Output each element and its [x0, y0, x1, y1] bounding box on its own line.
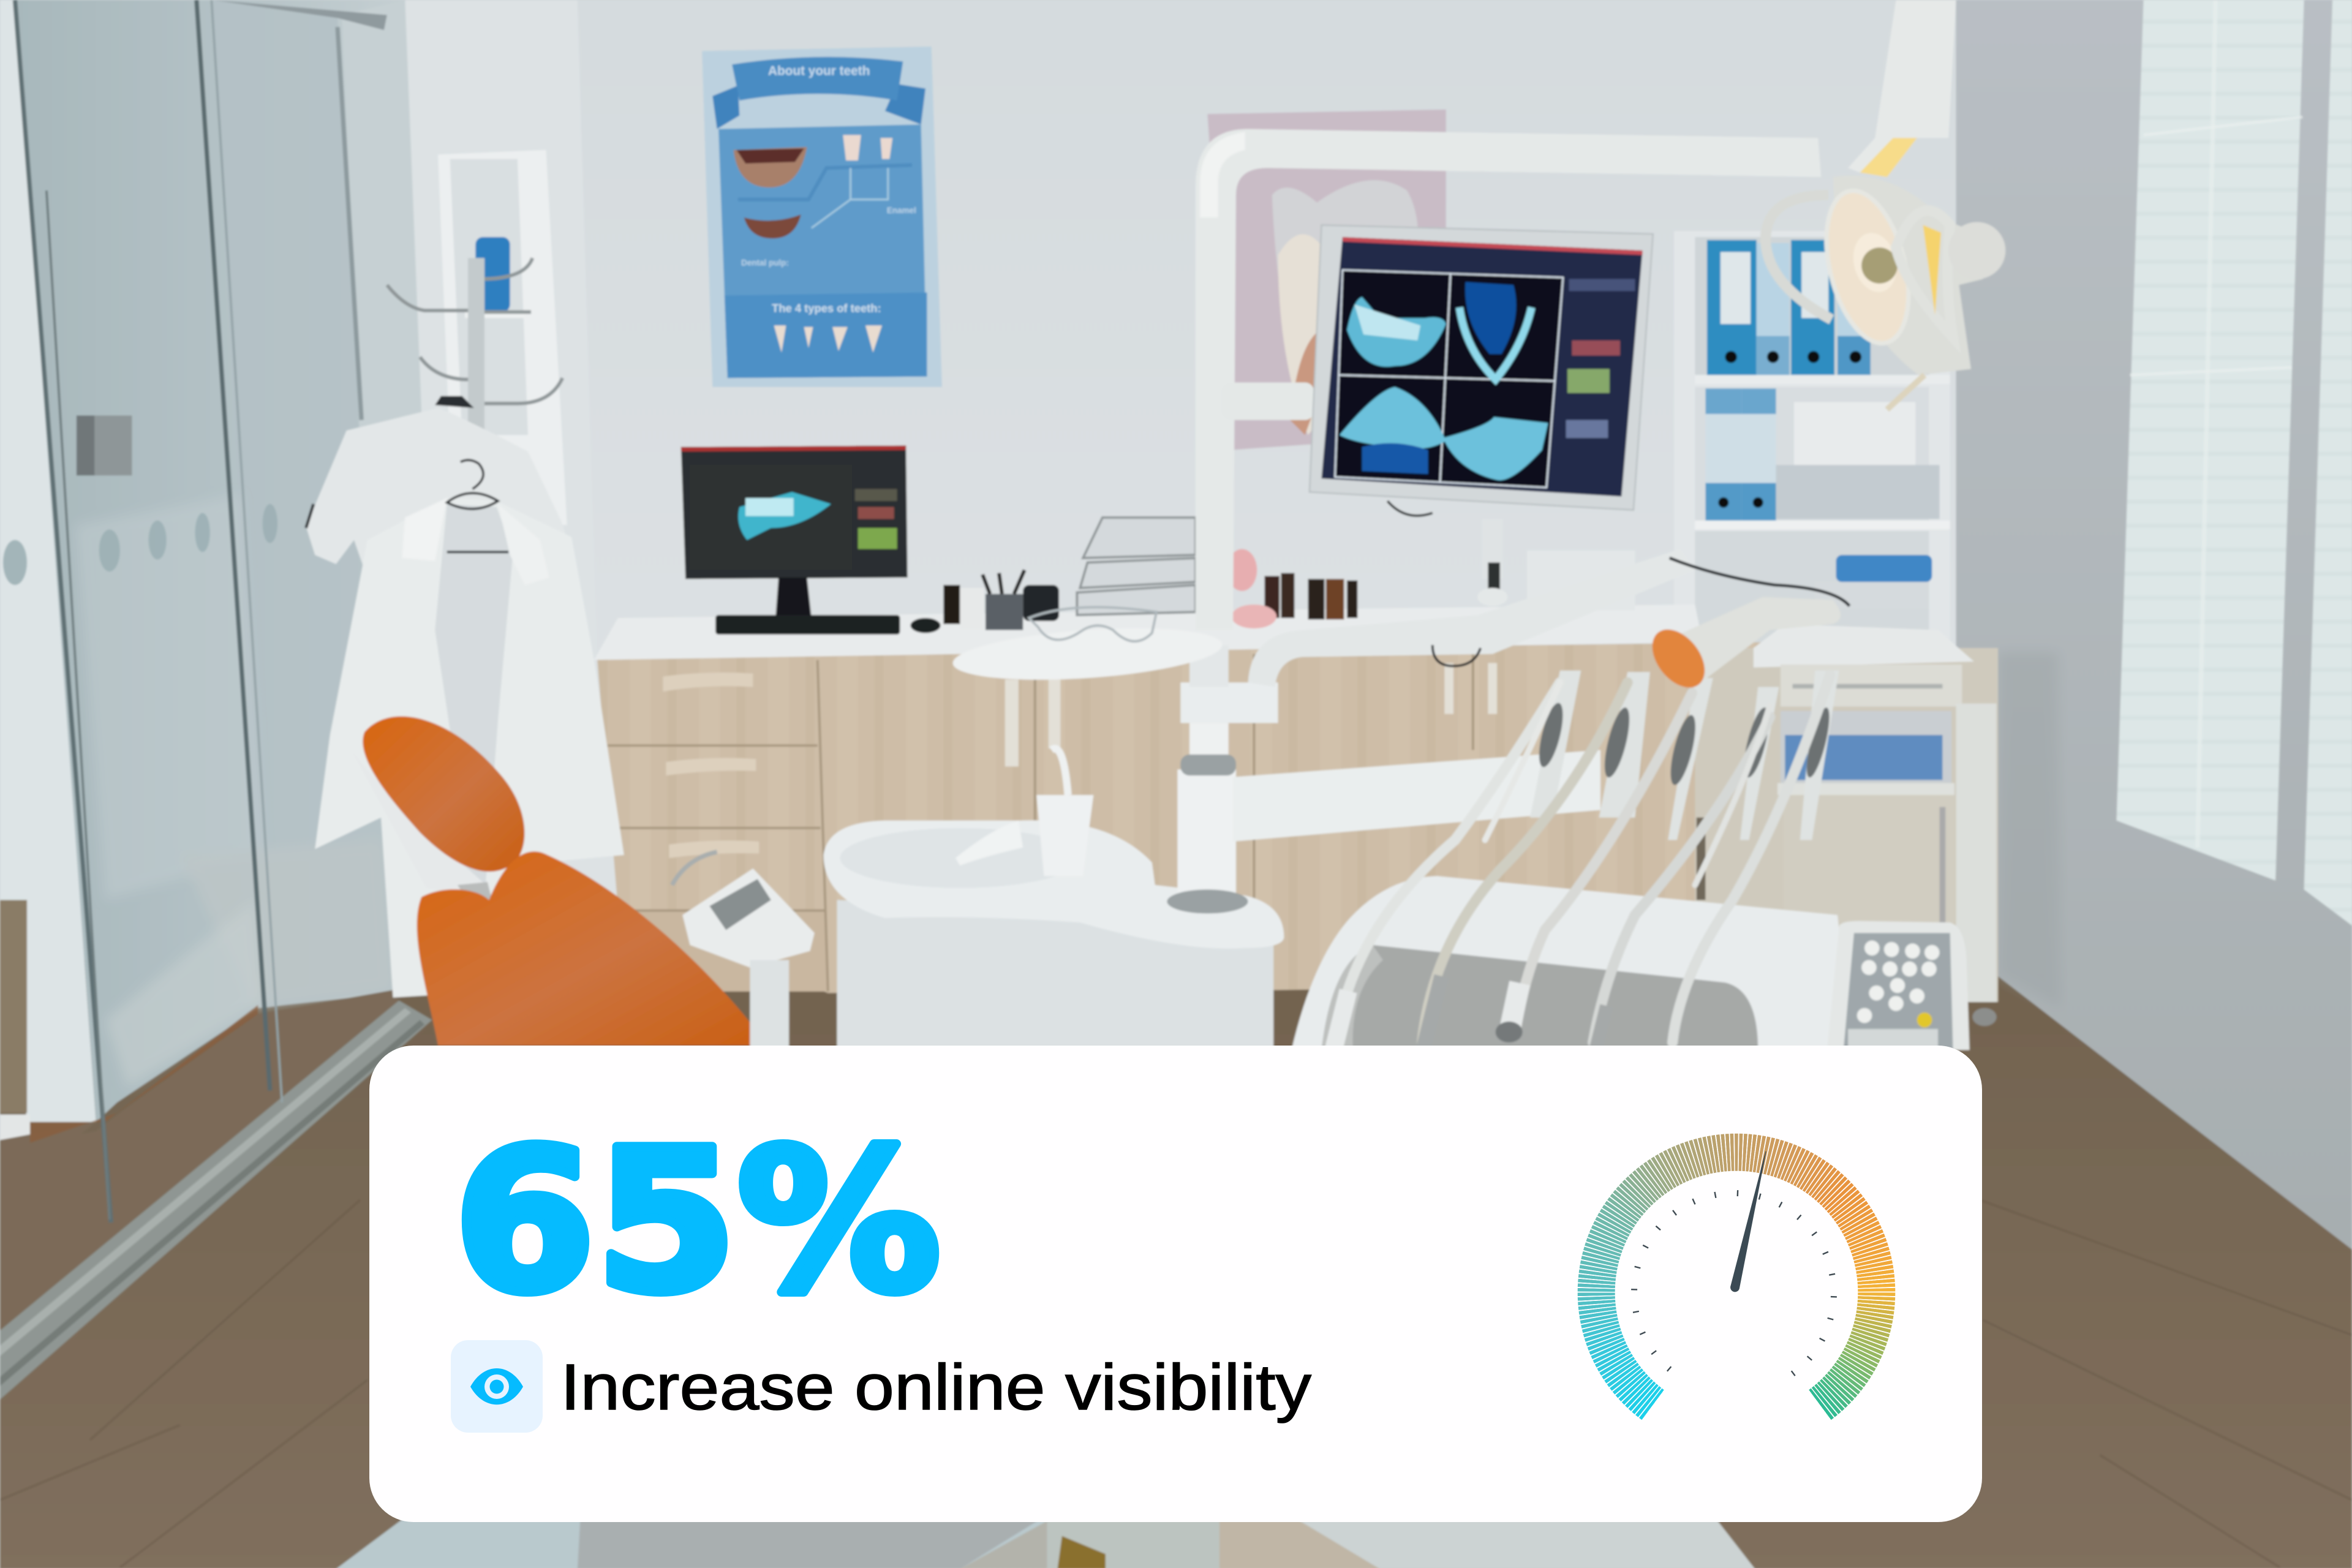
- dental unit horizontal arm: [1233, 750, 1600, 842]
- back coat: [306, 408, 578, 630]
- floor: [0, 960, 2352, 1568]
- icon: eye in rounded square: [451, 1340, 543, 1433]
- right wall with windows: [1956, 0, 2352, 1250]
- handpieces: [1325, 974, 1613, 1051]
- ceiling operating lamp: [1765, 0, 2005, 410]
- instrument tubes: [1335, 675, 1830, 1046]
- stat label: Increase online visibility: [560, 1351, 1311, 1423]
- instrument tray and glasses: [951, 607, 1224, 687]
- cabinets: [597, 642, 1785, 993]
- tooth anatomy poster: About your teeth: [768, 64, 870, 78]
- chair foot visible below the card: [336, 1515, 1755, 1568]
- gauge meter: [1578, 1133, 1895, 1420]
- tooth anatomy poster: Enamel: [887, 206, 916, 215]
- floor planks: [0, 1200, 2352, 1567]
- side control panel: [672, 852, 815, 1050]
- main dental unit housing: [1292, 876, 1852, 1050]
- pink tooth poster: [1207, 110, 1446, 450]
- curing light: [1642, 597, 1841, 698]
- paper trays: [1077, 518, 1196, 615]
- tooth anatomy poster: The 4 types of teeth:: [772, 301, 881, 314]
- shelf unit with binders: [1674, 231, 1950, 651]
- stat card: [369, 1046, 1982, 1522]
- glass partition: [0, 0, 432, 1400]
- gauge ticks and needle: [1631, 1151, 1837, 1376]
- tooth anatomy poster: Dental pulp:: [741, 258, 789, 267]
- spittoon base: [823, 748, 1284, 1047]
- wall niche with bottle: [438, 150, 567, 525]
- upper delivery arm: [1248, 549, 1850, 687]
- countertop: [594, 605, 1703, 660]
- keypad: [1827, 921, 1970, 1050]
- bottles and dentures: [1227, 519, 1635, 628]
- coat rack: [387, 258, 562, 498]
- tooth anatomy poster: [702, 47, 942, 387]
- right cabinet and drawer: [1695, 624, 1998, 1026]
- handpiece holders: [1530, 671, 1839, 840]
- side wall panel: [393, 0, 618, 998]
- dental column, arm and clamp: [1180, 129, 1821, 756]
- big monitor with teeth scans: [1310, 225, 1653, 516]
- front coat: [306, 396, 624, 998]
- dental chair headrest and backrest: [351, 717, 768, 1046]
- stat number 65%: 65%: [454, 1108, 941, 1336]
- gauge gradient ring: [1578, 1133, 1895, 1420]
- back wall: [0, 0, 1980, 1050]
- small monitor, keyboard and desk items: [681, 445, 1059, 635]
